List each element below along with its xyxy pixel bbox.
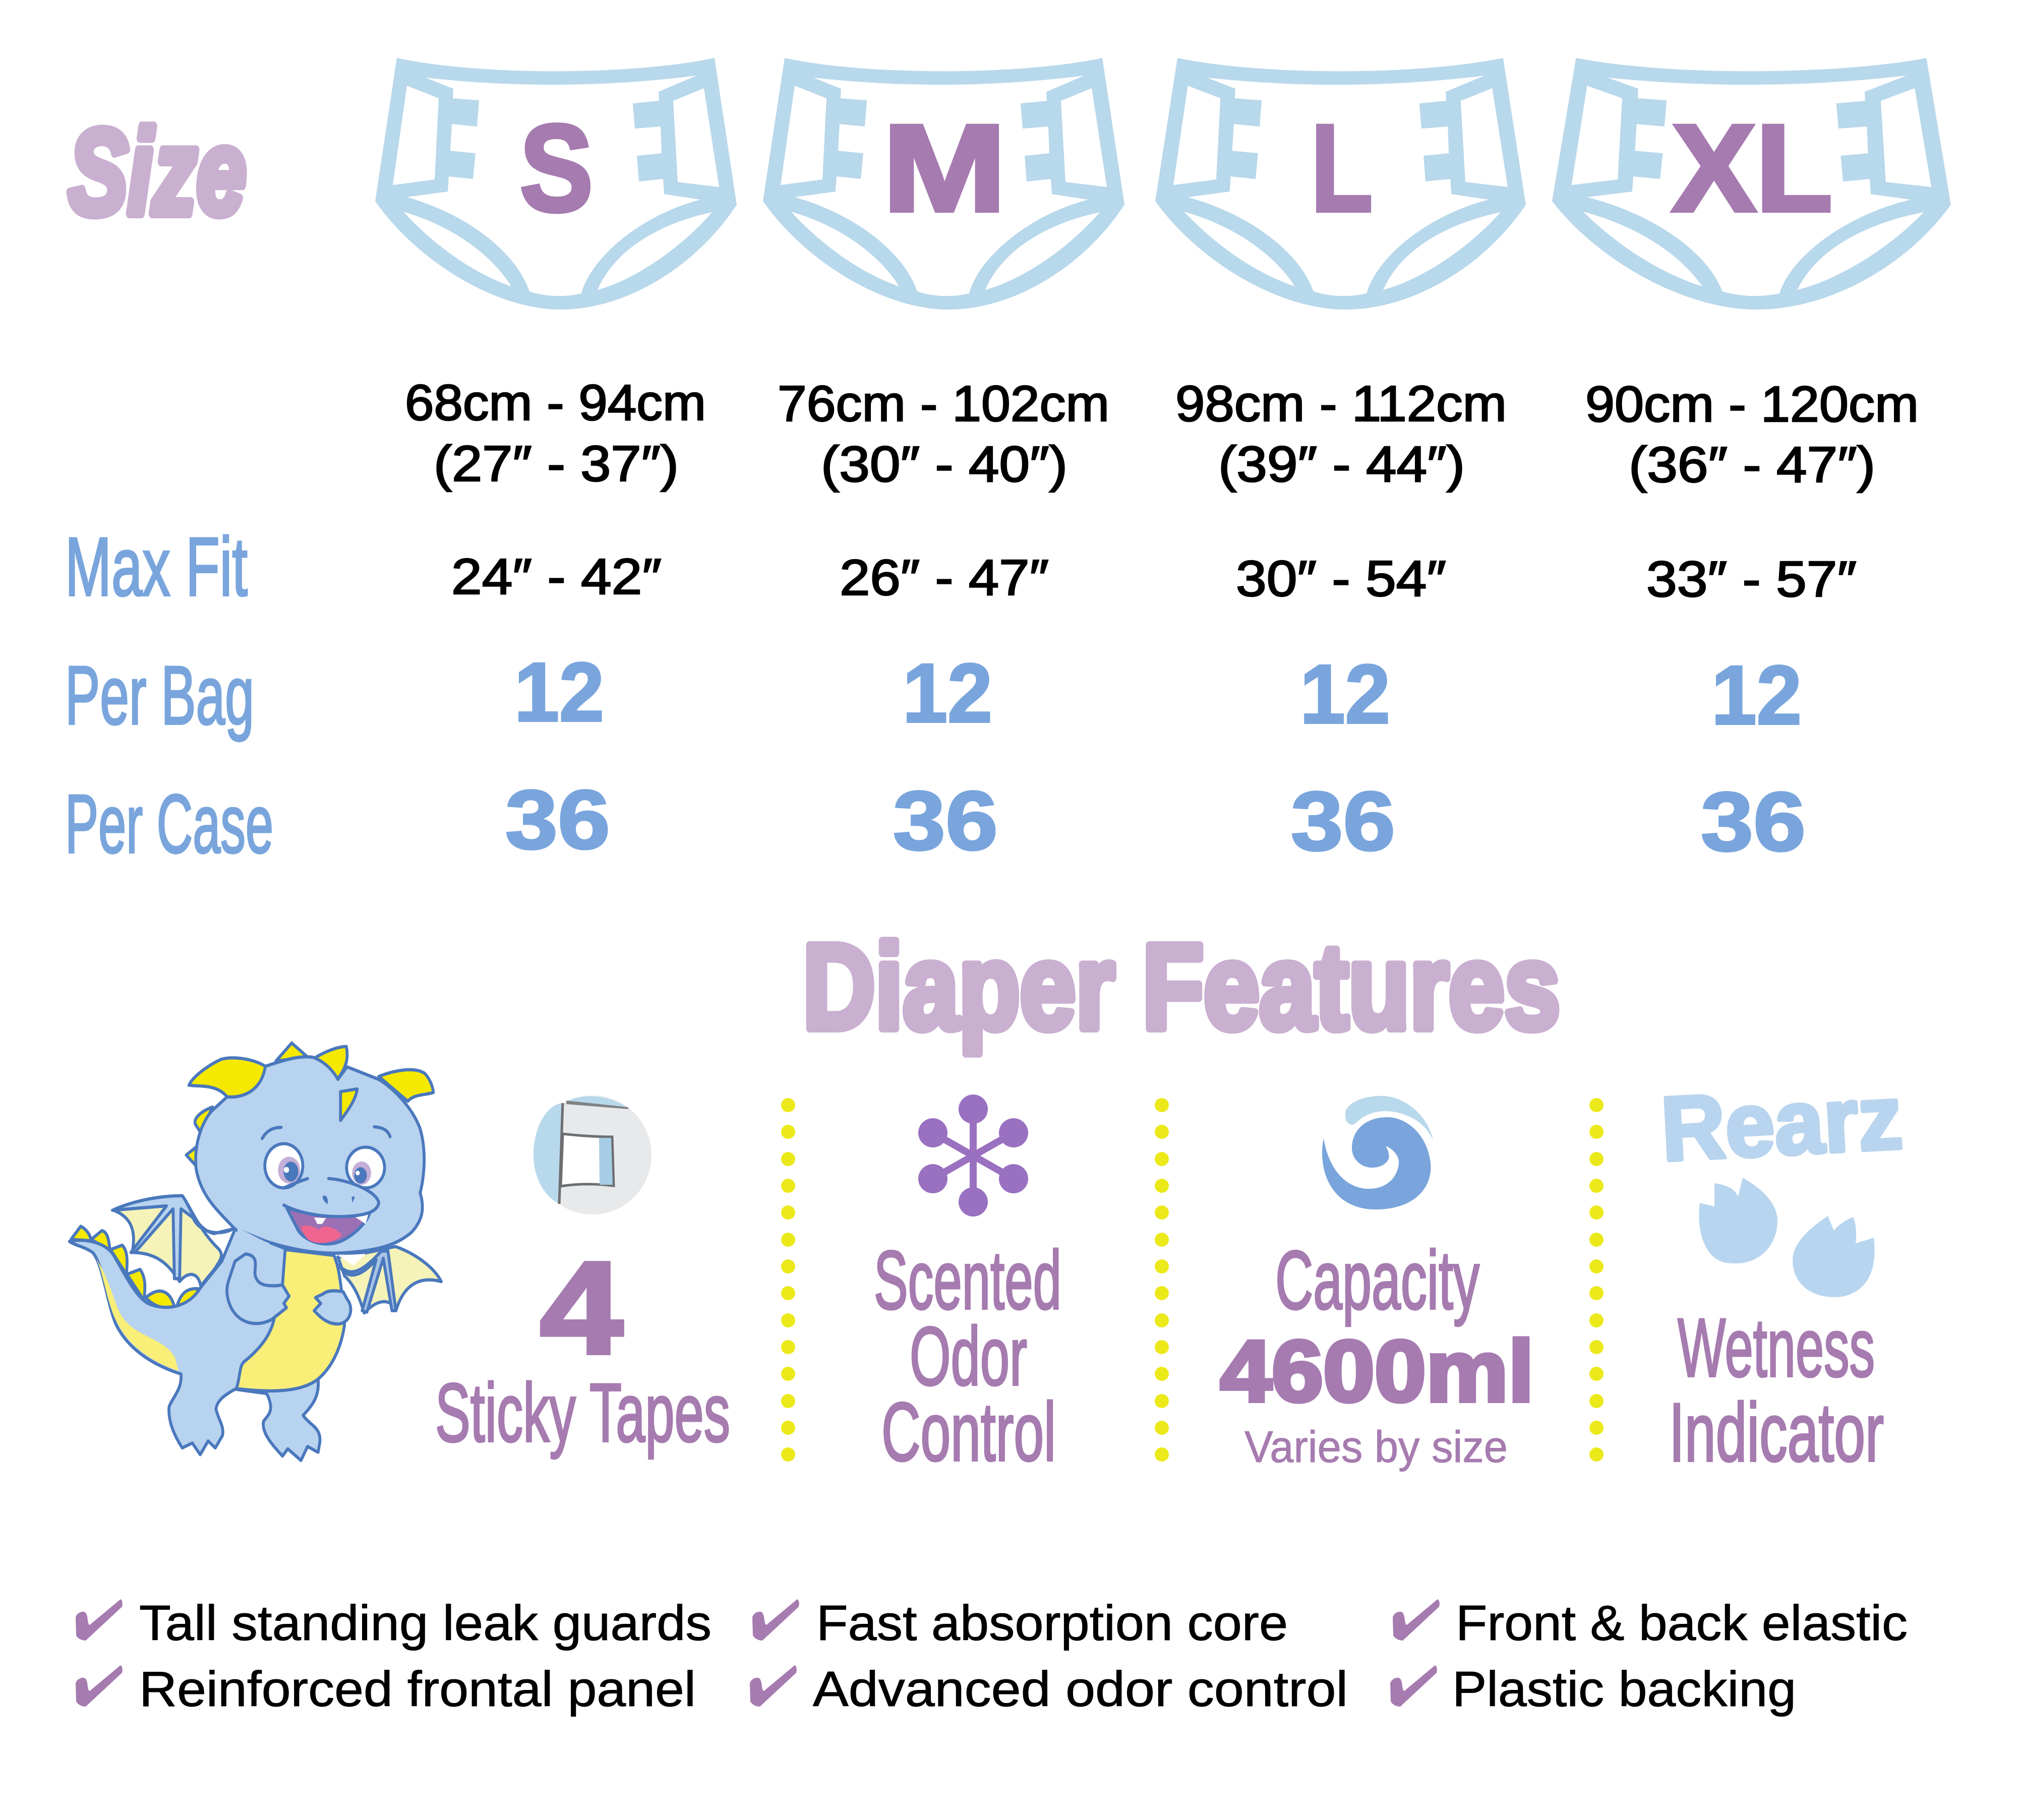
heading: Size: Size xyxy=(69,104,246,239)
mouth xyxy=(286,1207,370,1244)
head horns xyxy=(186,1043,433,1166)
feature label: Indicator xyxy=(1669,1386,1884,1479)
waist range S: (27″ - 37″) xyxy=(434,436,679,492)
waist range S xyxy=(405,375,706,492)
feature: sticky tapes xyxy=(435,1096,730,1459)
tail underside xyxy=(94,1256,179,1371)
capacity note: Varies by size xyxy=(1244,1422,1508,1472)
per bag M: 12 xyxy=(903,647,992,740)
right wing xyxy=(338,1247,441,1313)
heading: Diaper Features: Diaper Features xyxy=(803,919,1560,1054)
feature: capacity xyxy=(1220,1096,1534,1472)
brand: Rearz: Rearz xyxy=(1659,1066,1905,1180)
left eye xyxy=(262,1127,303,1188)
waist range L xyxy=(1175,376,1507,493)
arms xyxy=(227,1254,351,1324)
neck blend xyxy=(237,1228,269,1252)
icon: swirl xyxy=(1322,1096,1433,1209)
tail spikes xyxy=(71,1226,199,1308)
waist range XL xyxy=(1585,376,1919,493)
feature: wetness indicator xyxy=(1659,1066,1905,1479)
row label: Max Fit: Max Fit xyxy=(65,520,248,613)
divider dots 2 xyxy=(1155,1098,1169,1462)
body and tail xyxy=(70,1229,344,1461)
diaper icon: L xyxy=(1155,58,1526,310)
waist range L: 98cm - 112cm xyxy=(1175,376,1507,432)
waist range L: (39″ - 44″) xyxy=(1218,436,1465,493)
diaper icon: M xyxy=(763,58,1124,310)
checklist item: frontal panel: Reinforced frontal panel xyxy=(139,1661,696,1717)
waist range M: 76cm - 102cm xyxy=(778,376,1109,432)
size letter L: L xyxy=(1311,99,1373,237)
waist range XL: 90cm - 120cm xyxy=(1585,376,1919,433)
waist range XL: (36″ - 47″) xyxy=(1629,437,1875,493)
checklist item: absorption core: Fast absorption core xyxy=(816,1595,1288,1651)
diaper icon: S xyxy=(375,58,737,310)
belly xyxy=(236,1250,344,1391)
per case XL: 36 xyxy=(1701,775,1806,869)
capacity value: 4600ml xyxy=(1220,1323,1534,1420)
checklist item: backing: Plastic backing xyxy=(1452,1661,1796,1717)
feature label: Odor xyxy=(910,1310,1027,1403)
per case L: 36 xyxy=(1291,775,1395,868)
number of tapes: 4 xyxy=(540,1235,624,1381)
feature label: Wetness xyxy=(1678,1301,1875,1394)
checklist item: leak guards: Tall standing leak guards xyxy=(139,1595,711,1651)
diaper icon: XL xyxy=(1552,58,1951,310)
max fit M: 26″ - 47″ xyxy=(840,550,1049,606)
left wing xyxy=(112,1196,232,1286)
right eye xyxy=(346,1127,390,1188)
row label: Per Bag: Per Bag xyxy=(65,649,254,742)
feature: scented odor control xyxy=(874,1095,1061,1478)
waist range S: 68cm - 94cm xyxy=(405,375,706,431)
row label: Per Case: Per Case xyxy=(65,777,273,870)
per bag S: 12 xyxy=(514,646,604,739)
head xyxy=(196,1057,424,1253)
divider dots 3 xyxy=(1589,1098,1604,1462)
feature label: Sticky Tapes xyxy=(435,1366,730,1459)
per bag L: 12 xyxy=(1300,648,1390,741)
max fit S: 24″ - 42″ xyxy=(451,549,662,605)
divider dots 1 xyxy=(781,1098,795,1462)
max fit XL: 33″ - 57″ xyxy=(1646,551,1857,608)
checklist item: odor control: Advanced odor control xyxy=(813,1661,1348,1717)
snout xyxy=(284,1179,379,1217)
icon: footprints xyxy=(1699,1178,1875,1297)
feature label xyxy=(1669,1301,1884,1479)
feature label: Capacity xyxy=(1275,1234,1479,1326)
feature label: Control xyxy=(881,1385,1056,1478)
icon: scent molecule xyxy=(918,1095,1028,1217)
per case S: 36 xyxy=(505,773,610,867)
forehead spot xyxy=(340,1089,357,1120)
per case M: 36 xyxy=(893,774,998,868)
feature label xyxy=(874,1234,1061,1478)
feature label: Scented xyxy=(874,1234,1061,1326)
per bag XL: 12 xyxy=(1711,649,1802,742)
size letter S: S xyxy=(520,99,593,237)
size letter M: M xyxy=(882,99,1006,237)
dragon mascot xyxy=(70,1043,441,1461)
waist range M: (30″ - 40″) xyxy=(821,436,1067,493)
icon: tape xyxy=(533,1096,651,1215)
waist range M xyxy=(778,376,1109,493)
checklist item: elastic: Front & back elastic xyxy=(1456,1595,1908,1651)
max fit L: 30″ - 54″ xyxy=(1236,551,1446,607)
size letters XL: XL xyxy=(1672,99,1832,237)
